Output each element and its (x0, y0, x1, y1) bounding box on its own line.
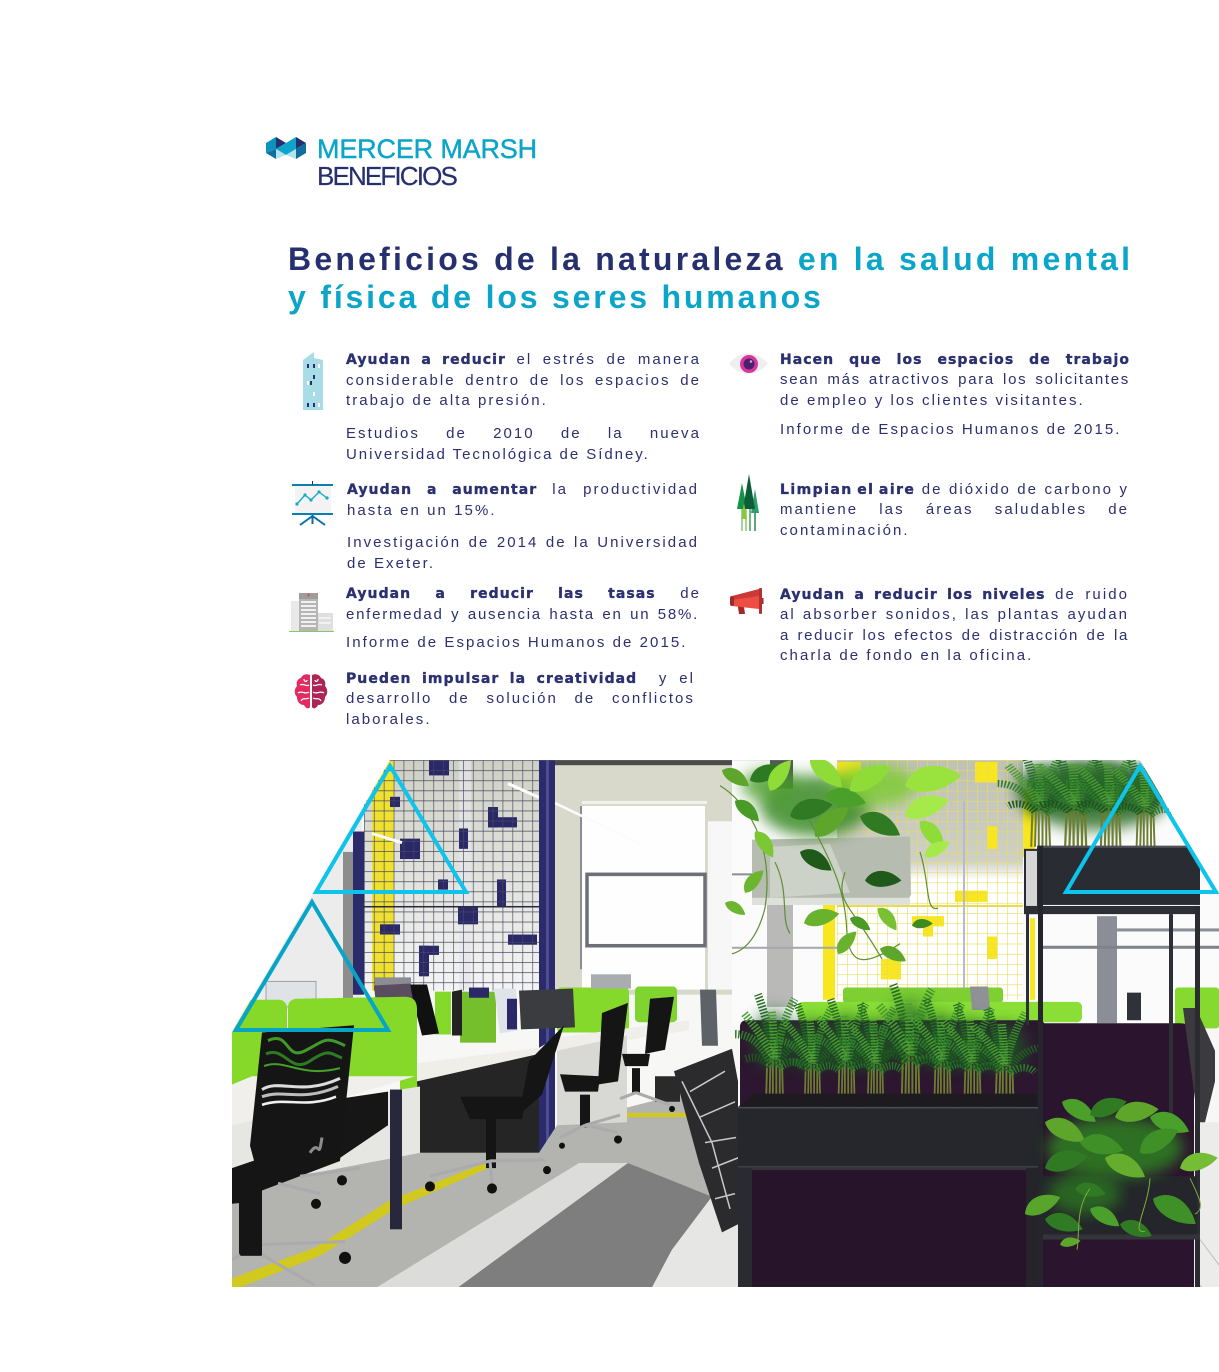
line: charla de fondo en la oficina. (780, 647, 1033, 664)
line: Investigación de 2014 de la Universidad (347, 534, 699, 551)
line: Pueden impulsar la creatividad y el (346, 670, 695, 687)
purple panels (740, 1020, 1045, 1112)
logo: Mercer Marsh Beneficios (266, 134, 537, 191)
palms row (735, 994, 811, 1107)
tiled mesh wall (364, 760, 539, 962)
tall stand palms (1023, 761, 1167, 830)
icon: logo mark (266, 137, 306, 159)
icon: megaphone (730, 588, 764, 614)
line: Ayudan a reducir los niveles de ruido (780, 586, 1129, 603)
line: Limpian el aire de dióxido de carbono y (780, 481, 1129, 498)
icon: hospital building (289, 593, 334, 632)
line: al absorber sonidos, las plantas ayudan (780, 606, 1129, 623)
line: Ayudan a reducir las tasas de (346, 585, 701, 602)
right side background (732, 760, 775, 766)
far desks partitions (557, 988, 629, 1032)
chair bases (232, 1093, 670, 1285)
line: Ayudan a reducir el estrés de manera (346, 351, 701, 368)
text block: estrés (346, 351, 701, 463)
line: de empleo y los clientes visitantes. (780, 392, 1085, 409)
title line 2: y física de los seres humanos (288, 279, 824, 315)
chairs (232, 990, 718, 1256)
line: Informe de Espacios Humanos de 2015. (780, 421, 1121, 438)
icon: brain (294, 674, 328, 708)
line: trabajo de alta presión. (346, 392, 548, 409)
pothos low leaves (1047, 1117, 1183, 1178)
icon: eye (729, 354, 768, 374)
green partitions foreground (232, 1000, 287, 1034)
triangle: lower left (236, 902, 388, 1030)
text block: aire (780, 481, 1129, 539)
line: Hacen que los espacios de trabajo (780, 352, 1130, 368)
line: a reducir los efectos de distracción de la (780, 627, 1129, 644)
desk leg (390, 1090, 402, 1229)
columns (353, 832, 364, 995)
back wall and windows (251, 809, 362, 1010)
title (288, 241, 1133, 315)
logo text: Mercer Marsh: MERCER MARSH (317, 134, 537, 164)
line: hasta en un 15%. (347, 502, 497, 519)
line: Universidad Tecnológica de Sídney. (346, 446, 650, 463)
text block: productividad (346, 481, 699, 572)
text block: creatividad (346, 670, 695, 728)
mesh chair foreground (674, 1049, 738, 1232)
logo text: Beneficios: BENEFICIOS (317, 161, 456, 191)
icon: presentation chart (292, 481, 333, 526)
hanging planter (752, 837, 911, 905)
line: Estudios de 2010 de la nueva (346, 425, 701, 442)
floor (232, 1092, 712, 1301)
long planter (738, 1094, 1038, 1107)
tall stand (1025, 850, 1038, 913)
title line 1: Beneficios de la naturaleza en la salud mental (288, 241, 1133, 277)
chair back pattern (262, 1038, 345, 1153)
line: considerable dentro de los espacios de (346, 372, 701, 389)
photo: office with plants and triangle outlines (232, 760, 1219, 1287)
line: enfermedad y ausencia hasta en un 58%. (346, 606, 699, 623)
icon: office tower (303, 352, 323, 410)
line: laborales. (346, 711, 432, 728)
low planter (1043, 1176, 1197, 1234)
desks (232, 1076, 415, 1125)
line: de Exeter. (347, 555, 435, 572)
line: Informe de Espacios Humanos de 2015. (346, 634, 687, 651)
pothos hanging leaves (760, 775, 870, 837)
monitors (266, 981, 316, 1007)
text block: atractivos (780, 352, 1130, 438)
triangle: right (1066, 766, 1216, 892)
line: Ayudan a aumentar la productividad (347, 481, 699, 498)
window frame right (1097, 916, 1117, 1023)
far green partitions (843, 988, 1003, 1003)
triangle: upper left (316, 766, 466, 892)
under desk shadow (417, 1054, 539, 1153)
floor right (1194, 1122, 1219, 1287)
line: mantiene las áreas saludables de (780, 501, 1129, 518)
line: sean más atractivos para los solicitantes (780, 371, 1130, 388)
line: contaminación. (780, 522, 910, 539)
text block: enfermedad (346, 585, 701, 651)
icon: trees (737, 474, 759, 531)
line: desarrollo de solución de conflictos (346, 690, 695, 707)
text block: ruido (780, 586, 1129, 664)
